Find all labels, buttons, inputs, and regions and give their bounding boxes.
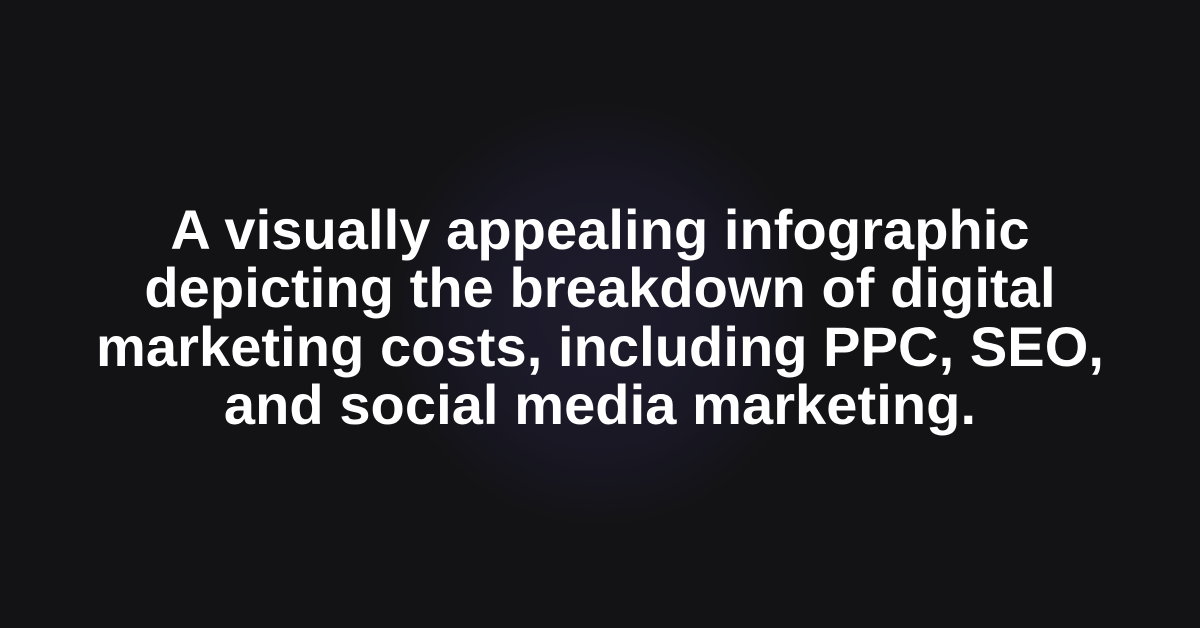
title: A visually appealing infographic [170, 198, 1030, 261]
title: depicting the breakdown of digital [144, 256, 1056, 319]
title: marketing costs, including PPC, SEO, [96, 315, 1104, 378]
title [96, 198, 1104, 436]
title: and social media marketing. [224, 373, 976, 436]
